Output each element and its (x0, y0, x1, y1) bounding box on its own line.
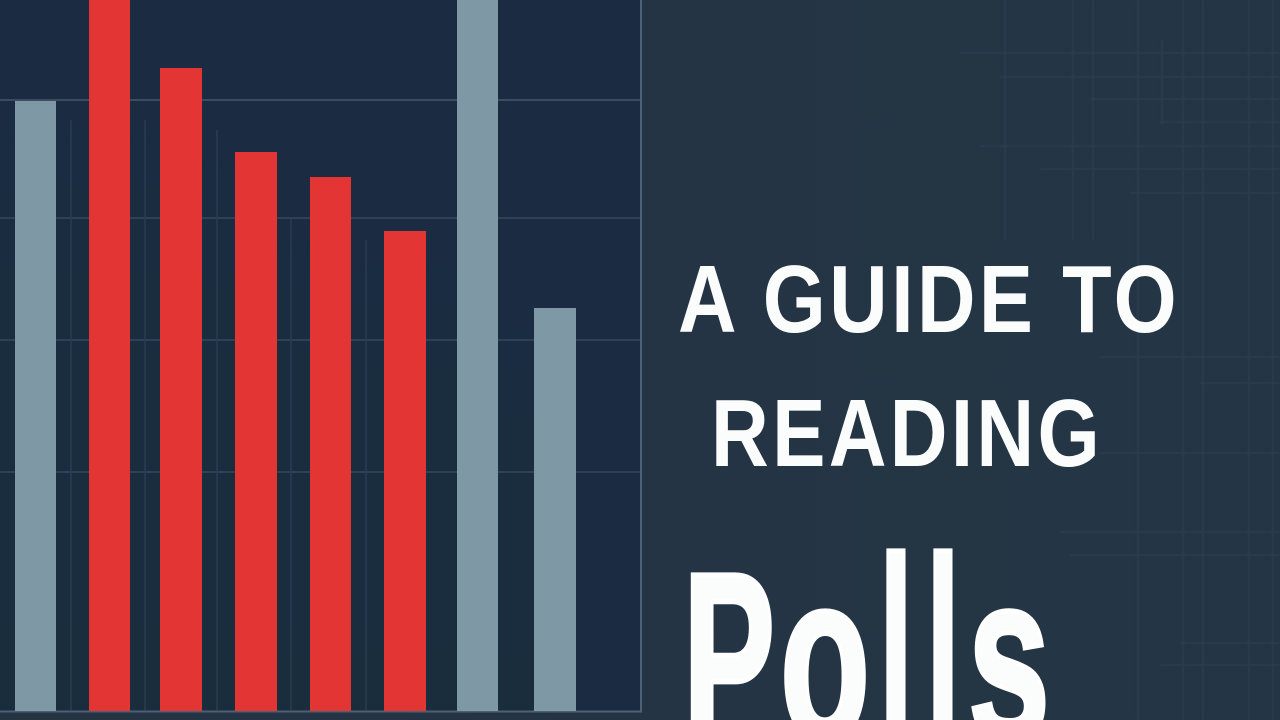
bar: grey 3 (534, 308, 576, 711)
bar: grey 2 (457, 0, 498, 711)
title line: READING: READING (711, 380, 1103, 487)
bar: red 4 (310, 177, 351, 711)
bar: red 5 (384, 231, 426, 711)
title line: A GUIDE TO: A GUIDE TO (678, 246, 1180, 353)
bar: red 2 (160, 68, 202, 711)
panel: bar chart (0, 0, 642, 712)
title word: Polls (690, 548, 1046, 720)
bar: red 1 (89, 0, 130, 711)
bar: grey 1 (15, 101, 56, 711)
bar: red 3 (235, 152, 277, 711)
